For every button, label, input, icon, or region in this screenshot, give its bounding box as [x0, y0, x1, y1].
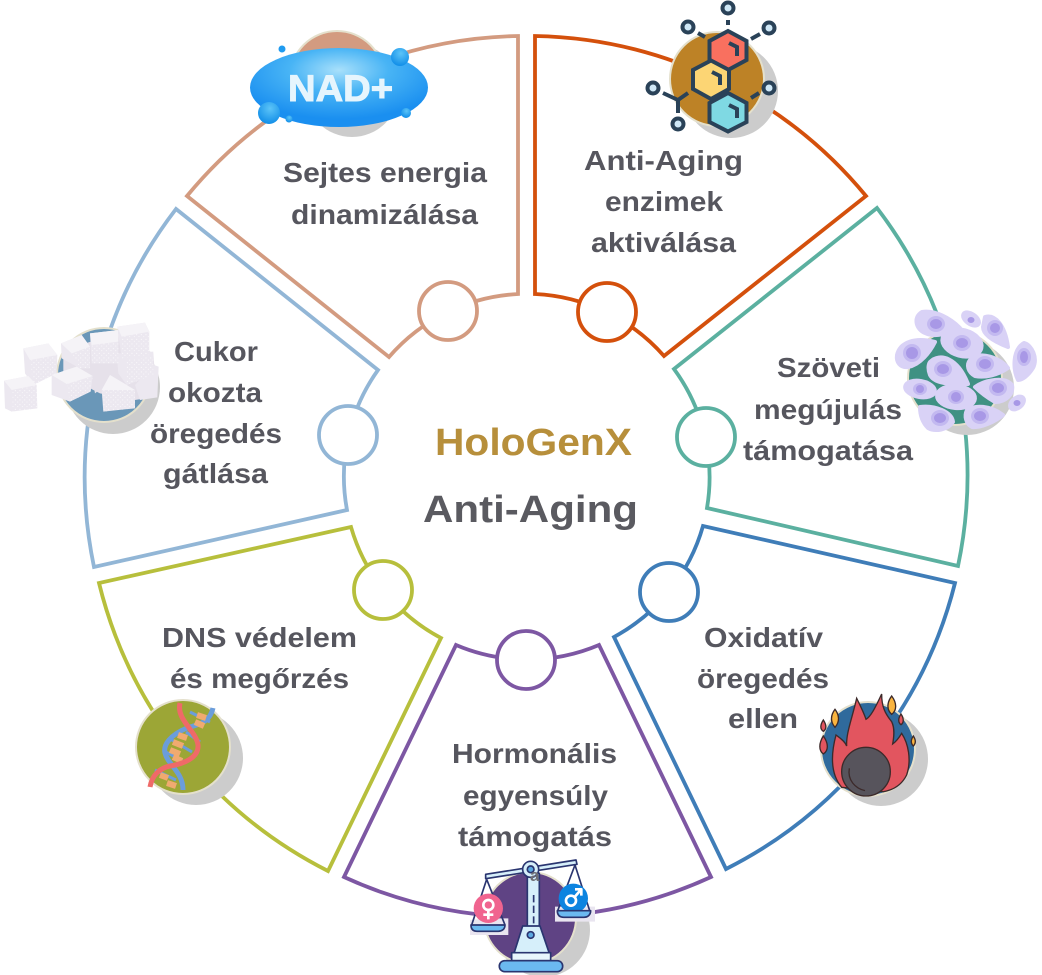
panel: Cukor okozta öregedés gátlása: [4, 209, 378, 567]
text: Cukor okozta öregedés gátlása: [150, 336, 282, 489]
text: Anti-Aging enzimek aktiválása: aktiválása: [591, 227, 736, 258]
segment outline: purple: [344, 645, 711, 917]
text: Hormonális egyensúly támogatás: Hormonális: [452, 738, 617, 769]
segment outline: green: [99, 527, 441, 871]
icon: fire: [820, 694, 928, 806]
connector circle: salmon: [419, 282, 477, 340]
connector circle: purple: [497, 631, 555, 689]
text: Oxidatív öregedés ellen: [697, 622, 829, 734]
connector circle: green: [354, 561, 412, 619]
text: Hormonális egyensúly támogatás: támogatás: [458, 821, 612, 852]
icon: NAD+: NAD+: [288, 68, 393, 109]
text: Oxidatív öregedés ellen: ellen: [728, 703, 798, 734]
panel: Oxidatív öregedés ellen: [614, 526, 955, 869]
text: Cukor okozta öregedés gátlása: okozta: [168, 377, 262, 408]
icon: NAD+: [250, 31, 428, 137]
text: Szöveti megújulás támogatása: megújulás: [754, 394, 902, 425]
text: DNS védelem és megőrzés: [162, 622, 357, 694]
text: DNS védelem és megőrzés: és megőrzés: [170, 663, 349, 694]
icon: balance scale: a: [530, 866, 540, 885]
icon: molecule: [648, 2, 778, 138]
text: Oxidatív öregedés ellen: Oxidatív: [704, 622, 823, 653]
icon: cells: [897, 310, 1035, 435]
icon: balance scale: [470, 860, 595, 975]
title: HoloGenX Anti-Aging: HoloGenX: [435, 422, 633, 464]
panel: Szöveti megújulás támogatása: [674, 208, 1035, 566]
text: Sejtes energia dinamizálása: dinamizálása: [291, 199, 478, 230]
segment outline: salmon: [187, 36, 518, 357]
text: Anti-Aging enzimek aktiválása: enzimek: [605, 186, 723, 217]
text: Szöveti megújulás támogatása: Szöveti: [777, 352, 880, 383]
connector circle: orange: [578, 283, 636, 341]
connector circle: blue: [640, 563, 698, 621]
connector circle: teal: [677, 408, 735, 466]
panel: Sejtes energia dinamizálása: [187, 31, 518, 357]
segment outline: orange: [535, 36, 866, 356]
panel: Anti-Aging enzimek aktiválása: [535, 2, 866, 356]
text: Cukor okozta öregedés gátlása: Cukor: [174, 336, 258, 367]
text: Szöveti megújulás támogatása: [743, 352, 913, 466]
connector circle: light blue: [319, 406, 377, 464]
icon: sugar cubes: [4, 323, 160, 434]
text: Oxidatív öregedés ellen: öregedés: [697, 663, 829, 694]
text: Anti-Aging enzimek aktiválása: Anti-Aging: [584, 145, 743, 176]
text: DNS védelem és megőrzés: DNS védelem: [162, 622, 357, 653]
text: Hormonális egyensúly támogatás: [452, 738, 617, 852]
segment outline: light blue: [85, 209, 378, 567]
text: Sejtes energia dinamizálása: [283, 157, 487, 230]
panel: DNS védelem és megőrzés: [99, 527, 441, 871]
text: Anti-Aging enzimek aktiválása: [584, 145, 743, 258]
text: Cukor okozta öregedés gátlása: gátlása: [163, 458, 268, 489]
text: Hormonális egyensúly támogatás: egyensúly: [463, 780, 608, 811]
panel: Hormonális egyensúly támogatás: [344, 631, 711, 975]
text: Cukor okozta öregedés gátlása: öregedés: [150, 418, 282, 449]
text: Szöveti megújulás támogatása: támogatása: [743, 435, 913, 466]
title: HoloGenX Anti-Aging: Anti-Aging: [423, 489, 638, 531]
text: Sejtes energia dinamizálása: Sejtes energia: [283, 157, 487, 188]
icon: DNA: [136, 700, 243, 805]
segment outline: blue: [614, 526, 955, 869]
title: HoloGenX Anti-Aging: [423, 422, 638, 531]
segment outline: teal: [674, 208, 967, 566]
